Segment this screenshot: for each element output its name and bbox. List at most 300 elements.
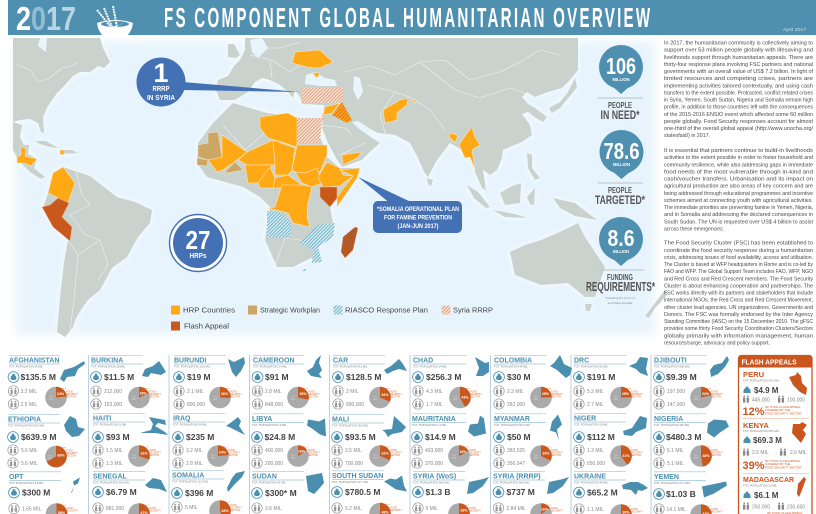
pie chart: 24%: FOOD [66,390,73,394]
flash appeal: Kenya: TOT. POPULATION 45.5 MIL [743,429,780,433]
panel: Nigeria [654,414,729,468]
panel: Ukraine: $65.2 M [587,488,618,498]
pie chart: 47%: FOOD [149,507,156,510]
pie chart: 41% [610,445,643,467]
pie chart: 29%: TOT [291,396,296,398]
panel: Ukraine [574,471,648,514]
text block: activities: cash/voucher transfers. Urbanisation and its impact on [664,176,813,182]
panel: Iraq [173,413,245,468]
panel: Chad [413,355,489,409]
pie chart: 58%: FOOD [66,507,74,510]
panel: Burkina [91,355,166,409]
panel: Somalia [172,470,245,514]
panel: Afghanistan: 2.5 MIL [20,402,37,408]
pie chart: 47%: SECURITY [149,510,161,512]
panel: Yemen [654,472,727,514]
pie chart: 31%: SECTOR [149,454,159,457]
pie chart: 45%: 45% [221,509,229,513]
text block: introduction [664,40,813,139]
pie chart: 26%: 26% [221,392,229,396]
pie chart: 30% [610,504,643,514]
panel: Syria (WoS): SYRIA (WoS) [413,474,456,480]
pie chart: 48%: HRP [694,458,699,460]
panel: Somalia: $396 M [185,488,213,498]
pie chart: 22%: FOOD [711,390,718,394]
pie chart: 33%: FOOD [551,449,558,452]
panel: Libya: TOT. POPULATION 6.4 MIL [252,423,287,427]
panel: Colombia: TOT. POPULATION 49 MIL [494,364,528,368]
panel: Ethiopia [8,414,85,468]
pie chart: 19% [128,387,161,408]
panel: Syria (WoS): 9 MIL [426,506,438,512]
panel: Libya: LIBYA [252,416,272,423]
pie chart: 48%: FOOD [390,506,397,510]
pie chart: 48%: FOOD [711,449,718,452]
pie chart: 32%: FOOD [390,449,397,452]
stat: 8.6 billion funding requirements: BILLION [613,249,630,254]
pie chart: 28%: FOOD [469,507,476,510]
panel: Cameroon [252,355,322,409]
pie chart: 31%: FOOD [149,449,156,452]
flash appeal: Madagascar: 230,650 [787,504,805,510]
panel: Afghanistan: $135.5 M [20,372,56,382]
pie chart: 48%: SECURITY [711,452,723,454]
pie chart: 26%: TOT [213,396,218,398]
panel: Burundi: TOT. POPULATION 10.5 MIL [174,364,211,368]
pie chart: 68%: SECTOR [66,454,76,458]
panel: Colombia: 2.3 MIL [507,389,524,395]
panel: flash appeals [738,356,812,514]
pie chart: 16% [530,503,563,514]
pie chart: 24%: HRP [211,458,216,460]
panel: Ethiopia: 5.6 MIL [21,461,38,467]
icon: wheat bowl [97,6,133,38]
text block: food security cluster [664,241,813,346]
text block: activities: It is essential that partners continue to build-in livelihoods [664,148,813,154]
panel: South Sudan: TOT. POPULATION 12.7 MIL [332,480,369,484]
flash appeal: Kenya: KENYA [743,421,769,430]
pie chart: 68%: 68% [57,454,65,458]
icon: flash appeal countries [42,187,358,258]
panel: Djibouti [654,355,729,409]
panel: Chad: 1.7 MIL [426,402,443,408]
pie chart: 68%: TOT [48,456,53,458]
panel: Burkina: 153,000 [104,402,122,408]
pie chart: 25%: SECTOR [551,396,561,398]
stat: 106 million people in need: IN NEED* [600,108,640,122]
text block: food security cluster: coordinate the food security response during a humanitarian [664,248,813,254]
badge: 27 HRPs: HRPs [190,251,206,260]
pie chart: 32%: HRP [373,458,378,460]
pie chart: 43%: SECURITY [711,510,723,514]
pie chart: 58%: SECURITY [66,510,79,512]
text block: food security cluster: resources/surge, advocacy and policy support. [664,340,770,346]
stat: 8.6 billion funding requirements: FUNDING [607,273,633,282]
text block: introduction: one-third of the overall global appeal (http://www.unocha.org/ [664,126,813,132]
pie chart: 68%: FOOD [66,450,73,452]
panel: Mali [332,414,406,468]
pie chart: 22%: SECTOR [711,396,721,398]
panel: CAR: $128.5 M [346,372,381,382]
stat: 78.6 million people targeted: TARGETED* [595,193,645,207]
pie chart: 24%: TOT [49,396,54,398]
pie chart: 29%: FOOD [308,390,315,394]
pie chart: 19%: TOT [132,396,137,398]
panel: Sudan: $300* M [265,488,297,498]
legend: HRP Countries [183,308,236,314]
panel: CAR: CAR [333,358,348,364]
pie chart: 25%: FOOD [551,390,558,394]
callout: 1 RRRP in Syria: RRRP [152,86,170,93]
flash appeal: Peru: $4.9 M [754,386,779,395]
pie chart: 68%: SECURITY [66,452,78,455]
pie chart: 18%: SECURITY [469,452,481,454]
pie chart: 22% [690,387,723,408]
pie chart: 43%: SECURITY [470,393,482,396]
panel: Senegal: 881,000 [106,506,124,512]
pie chart: 31%: HRP [132,458,137,460]
flash appeal: Peru: COVERED BY THE [765,408,791,412]
flash appeal: Kenya: 39% [742,460,765,472]
stat: 78.6 million people targeted: 78.6 [604,138,640,164]
flash appeal: Peru: TOT. POPULATION 30.3 MIL [743,378,780,382]
panel: Niger: NIGER [574,416,596,422]
panel: Cameroon: 2.8 MIL [265,389,282,395]
pie chart: 22%: TOT [694,396,699,398]
stat: 8.6 billion funding requirements: and Flash Appeals [608,301,633,305]
pie chart: 48% [369,503,402,514]
pie chart: 30%: FOOD [631,508,638,511]
legend: RIASCO Response Plan [345,308,428,314]
stat: 78.6 million people targeted: MILLION [613,162,631,167]
pie chart: 18%: 18% [459,450,467,454]
text block: introduction: support over 53 million people globally with lifesaving and [664,48,813,54]
panel: Senegal: SENEGAL [93,474,128,480]
text block: introduction: livelihoods support through humanitarian appeals. There are [664,55,813,61]
callout: Somalia operational plan [358,177,462,233]
panel: Syria (RRRP): 2.84 MIL [506,506,526,512]
panel: CAR: 890,000 [346,402,364,408]
pie chart: 43%: FOOD [470,390,477,394]
panel: Myanmar: 356,047 [507,461,525,467]
pie chart: 24%: SECURITY [66,393,78,396]
pie chart: 28% [448,503,481,514]
stat: 106 million people in need: PEOPLE [608,100,632,110]
pie chart: 32% [369,445,402,467]
panel: Libya [252,414,326,468]
panel: Chad: 4.3 MIL [426,389,443,395]
pie chart: 68% [45,446,78,467]
panel: South Sudan: 5.2 MIL [345,506,362,512]
pie chart: 24% [45,387,78,408]
flash appeal: Kenya: COVERED BY THE [765,462,791,466]
pie chart: 43%: SECTOR [470,396,480,398]
pie chart: 26%: SECTOR [230,396,240,398]
pie chart: 26%: FOOD [230,390,237,394]
legend [171,306,493,330]
pie chart: 41%: SECTOR [631,454,641,457]
pie chart: 32%: SECTOR [390,454,400,457]
panel: Somalia: TOT. POPULATION 12.3 MIL [172,480,209,484]
title: FS COMPONENT GLOBAL HUMANITARIAN OVERVIEW [164,2,650,33]
text block: food security cluster: Donors. The FSC was formally endorsed by the Inter Agency [664,312,813,318]
panel: Djibouti: $9.39 M [666,372,697,382]
pie chart: 26%: SECURITY [230,393,242,396]
panel: Colombia: 282,000 [507,402,525,408]
icon: strategic workplan countries [197,132,243,173]
panel: Ethiopia: TOT. POPULATION 94.3 MIL [8,424,45,428]
panel: Senegal [93,471,167,514]
panel: Haiti: TOT. POPULATION 11 MIL [93,422,127,426]
stat: 106 million people in need: 106 [606,53,636,79]
pie chart: 24%: SECTOR [66,396,76,398]
stat: 106 million people in need [598,45,643,122]
text block: activities: across these emergencies. [664,226,724,232]
panel: Myanmar: TOT. POPULATION 51.5 MIL [494,423,531,427]
panel: Niger: 1.3 MIL [587,448,604,454]
panel: DRC: $191 M [587,372,615,382]
panel: Mauritania: 493,000 [425,448,443,454]
pie chart: 25%: HRP [534,399,539,401]
callout: 1 RRRP in Syria: IN SYRIA [147,95,175,102]
panel: Myanmar: $50 M [507,432,531,442]
text block: activities [664,148,813,232]
flash appeal: Madagascar [743,475,806,514]
panel: Ukraine: TOT. POPULATION 45 MIL [574,480,608,484]
panel: Libya: 400,000 [265,448,283,454]
text block: introduction: stateofaid/) in 2017. [664,133,710,139]
pie chart: 43%: HRP [453,399,458,401]
pie chart: 16%: FOOD [551,507,558,510]
legend: Syria RRRP [453,308,493,314]
panel: Mauritania: $14.9 M [425,432,456,442]
pie chart: 18%: HRP [452,458,457,460]
panel: CAR: TOT. POPULATION 4.6 MIL [333,364,368,368]
panel: Nigeria: 5.1 MIL [667,448,684,454]
pie chart: 43%: FOOD [711,508,718,511]
panel: DRC: DRC [574,358,589,364]
pie chart: 43%: TOT [453,396,458,398]
pie chart: 31%: TOT [132,455,137,457]
pie chart: 32%: 32% [381,393,389,397]
flash appeal: Kenya: FOOD SECURITY SECTOR [765,466,802,470]
panel: Afghanistan [8,355,85,409]
text block: introduction: In 2017, the humanitarian community is collectively aiming to [664,40,813,46]
panel: Libya: $24.8 M [264,432,295,442]
pie chart: 29%: SECURITY [308,393,320,396]
panel: Iraq: TOT. POPULATION 36 MIL [173,422,207,426]
panel: Mali: MALI [332,416,349,424]
pie chart: 16%: TOT [291,455,296,457]
stat: 106 million people in need: MILLION [612,77,630,82]
pie chart: 25%: TOT [614,396,619,398]
pie chart: 43%: 43% [461,396,469,400]
borders [17,42,560,330]
panel: DRC: 2.7 MIL [587,402,604,408]
pie chart: 45%: FOOD [230,504,237,507]
text block: activities: agricultural production are also areas of key concern and are [664,184,813,190]
panel: DRC [574,355,648,409]
pie chart: 45%: SECTOR [230,509,240,512]
pie chart: 43% [449,387,482,408]
pie chart: 29%: 29% [299,392,307,396]
pie chart: 48%: SECURITY [390,509,402,512]
panel: Haiti: $93 M [106,432,130,442]
pie chart: 16%: 16% [541,508,549,512]
flash appeal: Peru [742,370,807,418]
pie chart: 31%: SECURITY [149,452,161,454]
panel: Chad: $256.3 M [426,372,461,382]
panel: DRC: 5.2 MIL [587,389,604,395]
panel: Haiti: 1.3 MIL [106,461,123,467]
pie chart: 47% [128,503,161,514]
panel: OPT: TOT. POPULATION 4.8 MIL [9,481,44,485]
pie chart: 32% [369,387,402,408]
icon: RIASCO hatched countries [267,211,335,273]
panel: Ethiopia: 5.6 MIL [21,448,38,454]
pie chart: 29%: HRP [291,399,296,401]
panel: Haiti: HAITI [93,416,111,422]
pie chart: 28%: 28% [460,508,468,512]
pie chart: 16% [287,445,320,467]
pie chart: 25%: 25% [622,392,630,396]
pie chart: 31%: 31% [140,452,148,456]
panel: Niger: $112 M [587,432,615,442]
panel: Nigeria: TOT. POPULATION 187 MIL [654,423,690,427]
pie chart: 48%: SECTOR [711,454,721,457]
pie chart: 24%: TOT [211,455,216,457]
callout: Somalia operational plan: FOR FAMINE PREVENTION [384,214,452,222]
inland seas [38,38,372,135]
flash appeal: Kenya [742,421,807,472]
pie chart: 32%: TOT [373,396,378,398]
pie chart: 32%: SECTOR [390,396,400,398]
panel: Ukraine: UKRAINE [574,474,606,480]
flash appeal: Peru: FOOD SECURITY SECTOR [765,412,802,416]
pie chart: 32%: FOOD [390,390,397,394]
flash appeal: Peru: 12% [742,406,765,418]
panel: Mali: $93.5 M [345,432,376,442]
pie chart: 58% [46,503,79,514]
pie chart: 24%: 24% [57,392,65,396]
world map [13,38,668,337]
pie chart: 43% [690,504,723,514]
panel: Somalia: 5 MIL [185,505,198,511]
flash appeal: Kenya: OF TOTAL FLASH APPEAL [765,459,801,463]
flash appeal: Kenya: $69.3 M [753,436,782,445]
panel: Haiti [93,413,168,468]
panel: South Sudan [332,471,407,514]
pie chart: 24%: 24% [219,450,227,454]
panel: Yemen: YEMEN [654,474,679,481]
pie chart: 41%: 41% [622,454,630,458]
panel: Colombia [494,355,572,409]
panel: South Sudan: SOUTH SUDAN [332,473,383,480]
panel: Mauritania: TOT. POPULATION 4.2 MIL [412,423,447,427]
panel: Djibouti: TOT. POPULATION 906,000 [654,364,690,368]
pie chart: 32%: HRP [373,399,378,401]
panel: Ukraine: 1.1 MIL [587,507,604,513]
panel: Sudan: SUDAN [252,474,277,480]
panel: OPT: OPT [9,474,24,481]
pie chart: 19%: SECURITY [149,393,161,396]
panel: Sudan: TOT. POPULATION 41 MIL [252,480,286,484]
panel: Sudan: 3.6 MIL [265,506,282,512]
text block: activities: food needs of the most vulnerable through in-kind and [664,169,813,175]
panel: Syria (RRRP): TOT. POPULATION 18.6 MIL [493,480,530,484]
panel: Colombia: $30 M [507,372,531,382]
pie chart: 45%: SECURITY [230,506,242,510]
pie chart: 25%: SECURITY [631,393,643,396]
pie chart: 33%: SECURITY [551,452,563,454]
panel: Burkina: BURKINA [91,358,123,364]
panel: South Sudan: $780.5 M [345,487,380,497]
panel: Syria (WoS) [413,471,489,514]
flash appeal: Madagascar: MADAGASCAR [743,475,794,484]
pie chart: 45% [209,500,242,514]
panel: Burkina: 212,000 [104,389,122,395]
panel: Mali: TOT. POPULATION 18.3 MIL [332,424,369,428]
callout: Somalia operational plan: (JAN-JUN 2017) [398,223,438,230]
panel: Burkina: $11.5 M [104,372,134,382]
pie chart: 33%: SECTOR [551,454,561,457]
pie chart: 25%: 25% [542,392,550,396]
legend: Strategic Workplan [260,308,320,314]
text block: introduction: people globally. Food Security responses account for almost [664,119,813,125]
panel: Cameroon: 848,000 [265,402,283,408]
pie chart: 25%: HRP [614,399,619,401]
pie chart: 25%: SECTOR [631,396,641,398]
header bar [8,0,816,35]
panel: Libya: 200,000 [265,461,283,467]
panel: Senegal: $6.79 M [106,487,137,497]
panel: Iraq: IRAQ [173,416,191,422]
callout: 1 RRRP in Syria [136,58,300,106]
pie chart: 31% [128,445,161,467]
panel: Nigeria: 5.1 MIL [667,461,684,467]
panel: Cameroon: CAMEROON [253,358,295,364]
pie chart: 26% [209,387,242,408]
text block: introduction: implementing activities tailored contextually, and using cash [664,83,813,89]
pie chart: 19%: SECTOR [149,396,159,398]
panel: Burundi [174,355,245,409]
panel: Senegal: TOT. POPULATION 15.6 MIL [93,480,130,484]
panel: DRC: TOT. POPULATION 92 MIL [574,364,608,368]
panel: Myanmar: MYANMAR [494,416,530,423]
pie chart: 33%: 33% [542,452,550,456]
callout: 1 RRRP in Syria: 1 [153,58,169,88]
pie chart: 32%: 32% [381,452,389,456]
pie chart: 18% [448,445,481,467]
pie chart: 48%: 48% [702,454,710,458]
pie chart: 16%: 16% [298,450,306,454]
stat: 8.6 billion funding requirements [586,217,655,305]
pie chart: 41%: TOT [614,455,619,457]
flash appeal: Madagascar: $6.1 M [754,491,779,500]
panel: Sudan [252,471,324,513]
panel: Djibouti: 197,000 [667,389,685,395]
pie chart: 16%: HRP [291,458,296,460]
flash appeal: Kenya: 2.6 MIL [790,450,807,456]
panel: CAR: 2 MIL [346,389,359,395]
pie chart: 48% [690,445,723,467]
panel: Yemen: $1.03 B [666,489,696,499]
pie chart: 32%: SECURITY [390,452,402,454]
text block: introduction: limited resources and competing crises, partners are [664,76,813,82]
pie chart: 28%: SECURITY [469,510,481,512]
flash appeal: Peru: PERU [743,370,765,379]
flash appeal: Madagascar: TOT. POPULATION 23 MIL [743,484,777,488]
